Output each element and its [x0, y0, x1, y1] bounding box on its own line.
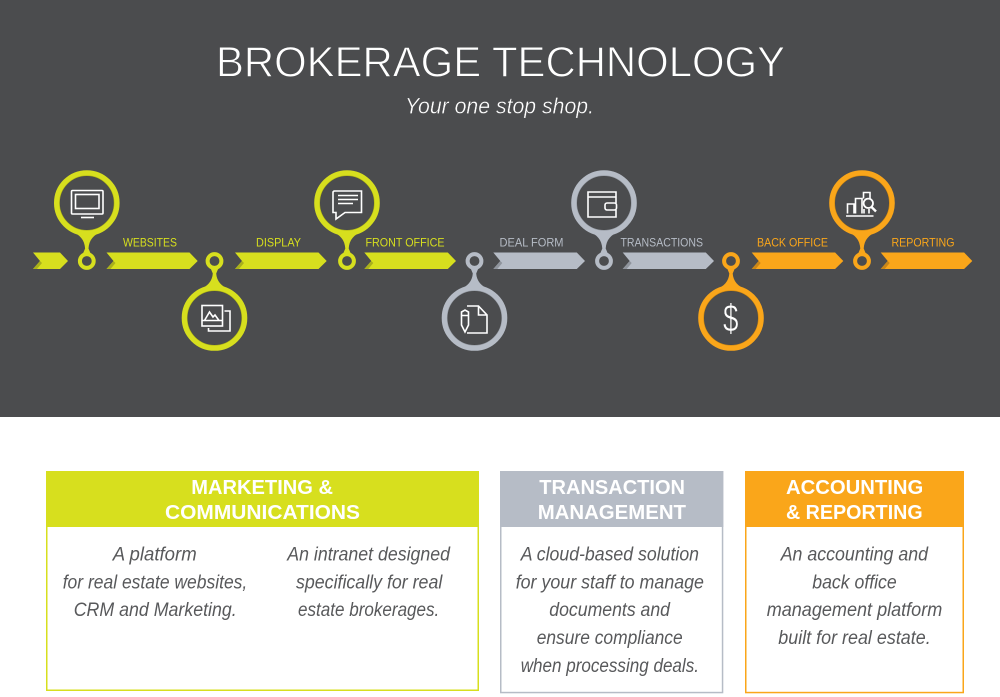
- subtitle: Your one stop shop.: [405, 94, 594, 118]
- label: websites: WEBSITES: [123, 236, 177, 250]
- icon: wallet: [588, 192, 616, 217]
- timeline arrow: reporting: [881, 252, 972, 269]
- text: intranet description: specifically for real: [296, 572, 443, 594]
- header band: marketing: [46, 471, 479, 527]
- text: transaction description: [516, 544, 704, 677]
- pin: images icon: [185, 254, 244, 348]
- text: accounting description: built for real estate.: [778, 628, 931, 649]
- timeline arrow: front office: [364, 252, 456, 269]
- heading: marketing and communications: COMMUNICATIONS: [165, 501, 360, 524]
- title: BROKERAGE TECHNOLOGY: [216, 38, 785, 86]
- text: platform description: A platform: [112, 544, 197, 566]
- heading: accounting and reporting: ACCOUNTING: [786, 476, 923, 499]
- label: reporting: REPORTING: [892, 236, 954, 250]
- pin: wallet icon: [574, 173, 634, 268]
- heading: marketing and communications: [165, 476, 360, 524]
- header band: accounting: [745, 471, 964, 527]
- text: accounting description: An accounting and: [780, 544, 929, 566]
- text: transaction description: for your staff to manage: [516, 572, 704, 594]
- text: transaction description: documents and: [549, 600, 671, 621]
- timeline arrow: display: [235, 252, 327, 269]
- panel: transaction management: [500, 471, 723, 693]
- label: front office: FRONT OFFICE: [366, 236, 444, 250]
- heading: transaction management: MANAGEMENT: [538, 501, 686, 524]
- timeline arrow: lead-in: [33, 252, 68, 269]
- label: back office: BACK OFFICE: [757, 236, 828, 250]
- heading: accounting and reporting: & REPORTING: [786, 501, 923, 524]
- timeline arrow: deal form: [493, 252, 585, 269]
- header band: transaction: [500, 471, 723, 527]
- icon: dollar sign: $: [723, 298, 739, 340]
- text: transaction description: when processing deals.: [521, 656, 699, 677]
- timeline arrow: back office: [752, 252, 843, 269]
- panel: accounting and reporting: [745, 471, 964, 693]
- pin: chart and magnifier icon: [832, 173, 892, 268]
- heading: marketing and communications: MARKETING &: [191, 476, 333, 499]
- text: intranet description: [286, 544, 451, 621]
- text: transaction description: ensure compliance: [537, 628, 683, 649]
- timeline arrow: websites: [106, 252, 198, 269]
- text: intranet description: An intranet designed: [286, 544, 451, 566]
- text: platform description: [63, 544, 247, 621]
- panel: marketing and communications: [46, 471, 479, 690]
- text: platform description: CRM and Marketing.: [74, 600, 237, 621]
- heading: transaction management: TRANSACTION: [539, 476, 685, 499]
- icon: monitor: [72, 190, 103, 218]
- text: platform description: for real estate websites,: [63, 572, 247, 594]
- timeline arrow: transactions: [623, 252, 714, 269]
- panel: dark header background: [0, 0, 1000, 417]
- icon: chat bubble: [333, 191, 362, 219]
- pin: document and pen icon: [445, 254, 504, 348]
- icon: images: [202, 306, 230, 331]
- pin: monitor icon: [57, 173, 117, 268]
- label: transactions: TRANSACTIONS: [620, 236, 703, 250]
- pin: dollar icon: [701, 254, 761, 348]
- icon: bar chart with magnifier: [846, 192, 876, 216]
- pin: chat icon: [317, 173, 377, 268]
- text: accounting description: [767, 544, 942, 649]
- label: deal form: DEAL FORM: [500, 236, 564, 250]
- text: intranet description: estate brokerages.: [298, 600, 439, 621]
- label: display: DISPLAY: [256, 236, 301, 250]
- heading: accounting and reporting: [786, 476, 923, 524]
- heading: transaction management: [538, 476, 686, 524]
- icon: document and pen: [462, 306, 487, 333]
- text: accounting description: management platform: [767, 600, 942, 621]
- text: accounting description: back office: [812, 572, 897, 594]
- text: transaction description: A cloud-based solution: [520, 544, 699, 566]
